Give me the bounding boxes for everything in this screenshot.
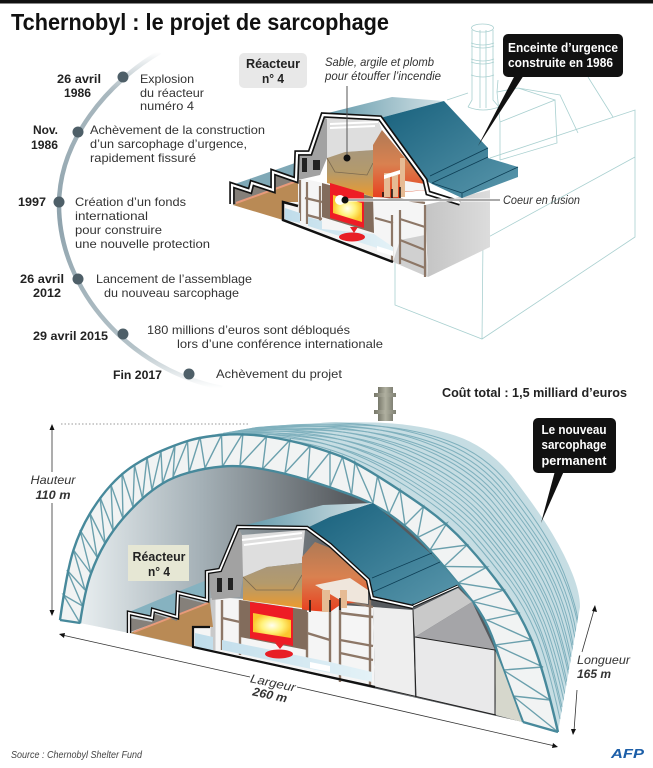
columns and floors (222, 600, 373, 686)
dimension: width: 260 m (250, 684, 289, 706)
reactor red shell (250, 602, 293, 646)
dimension: height: 110 m (36, 488, 71, 502)
callout: sand clay lead (324, 55, 441, 162)
front black outline (283, 202, 393, 262)
timeline descriptions (75, 72, 383, 381)
timeline dates: Fin 2017 (113, 368, 162, 382)
back wall (242, 530, 305, 577)
timeline descriptions: du nouveau sarcophage (104, 286, 239, 300)
sand (243, 563, 302, 608)
timeline descriptions: d’un sarcophage d’urgence, (90, 137, 247, 151)
timeline arc (59, 52, 222, 388)
back wall (327, 118, 382, 158)
timeline descriptions: Création d’un fonds (75, 195, 186, 209)
melting core (253, 613, 291, 638)
callout: sand clay lead: pour étouffer l’incendie (324, 69, 441, 83)
label: reactor no 4 in sarcophagus: n° 4 (148, 564, 171, 579)
source: Source : Chernobyl Shelter Fund (11, 750, 142, 761)
callout: melting core: Coeur en fusion (503, 193, 580, 207)
ground (130, 602, 213, 647)
dimension: length: 165 m (577, 667, 611, 681)
pool (285, 208, 393, 253)
timeline dots (54, 72, 194, 380)
label: reactor no 4: Réacteur (246, 56, 300, 71)
corium (265, 643, 293, 658)
dimension: height (30, 424, 250, 616)
dimension: length: Longueur (577, 653, 631, 667)
enclosure outline (232, 115, 460, 204)
truss members (60, 433, 558, 732)
timeline descriptions: lors d’une conférence internationale (177, 337, 383, 351)
title: Tchernobyl : le projet de sarcophage (11, 9, 389, 35)
melting core (333, 195, 362, 222)
ground (233, 180, 298, 220)
timeline descriptions: Achèvement de la construction (90, 123, 265, 137)
chimney (374, 387, 396, 421)
timeline dates: 2012 (33, 286, 61, 300)
timeline dates: 26 avril (20, 272, 64, 286)
label: reactor no 4 in sarcophagus (128, 545, 189, 581)
reactor block (240, 600, 307, 650)
blue roof (307, 503, 458, 607)
corium (339, 227, 365, 242)
dimension: height: Hauteur (30, 473, 77, 487)
timeline dates: 1997 (18, 195, 46, 209)
timeline descriptions: une nouvelle protection (75, 237, 210, 251)
pool (195, 633, 372, 682)
timeline dates: 26 avril (57, 72, 101, 86)
right chamber (373, 130, 427, 198)
stairs roof (129, 580, 207, 618)
timeline dates: 1986 (31, 138, 58, 152)
stairs back roof (232, 163, 298, 191)
reactor block (322, 183, 374, 233)
dimension: width: Largeur (249, 671, 298, 695)
back roof (320, 97, 444, 118)
dimension: width (59, 633, 558, 748)
outline (129, 527, 413, 633)
timeline descriptions: rapidement fissuré (90, 151, 196, 165)
truss outer and inner arcs (60, 434, 558, 732)
wireframe: original plant outline (395, 24, 635, 339)
back roof (238, 503, 373, 528)
truss band (60, 434, 558, 732)
label: reactor no 4: n° 4 (262, 71, 285, 86)
side blocks (413, 588, 472, 637)
eave (413, 586, 458, 606)
dome interior (80, 466, 523, 722)
reactor inside new sarcophagus (129, 503, 522, 722)
label: reactor no 4 (239, 53, 307, 88)
timeline dates: 29 avril 2015 (33, 329, 108, 343)
new sarcophagus dome (60, 422, 580, 732)
timeline descriptions: international (75, 209, 148, 223)
timeline descriptions: Explosion (140, 72, 194, 86)
timeline descriptions: 180 millions d’euros sont débloqués (147, 323, 350, 337)
timeline descriptions: numéro 4 (140, 99, 194, 113)
AFP logo: AFP (610, 746, 644, 761)
timeline descriptions: du réacteur (140, 86, 204, 100)
front black outline (193, 627, 375, 687)
concrete side (425, 190, 490, 277)
callout: emergency enclosure (478, 34, 623, 146)
timeline dates: Nov. (33, 123, 58, 137)
callout: new permanent sarcophagus (533, 418, 616, 523)
right chamber (302, 542, 368, 612)
label: reactor no 4 in sarcophagus: Réacteur (132, 549, 186, 564)
windows (302, 158, 320, 172)
timeline dates: 1986 (64, 86, 91, 100)
corrugation lines (206, 423, 578, 719)
total cost: Coût total : 1,5 milliard d’euros (442, 386, 627, 400)
blue roof (380, 101, 518, 198)
timeline descriptions: Achèvement du projet (216, 367, 343, 381)
callout: new permanent sarcophagus: sarcophage (542, 438, 607, 452)
dimension: length (571, 605, 631, 735)
reactor cutaway: emergency enclosure 1986 (232, 97, 518, 277)
lower interior (283, 178, 428, 277)
callout: new permanent sarcophagus: Le nouveau (542, 423, 606, 437)
timeline descriptions: Lancement de l’assemblage (96, 272, 252, 286)
callout: emergency enclosure: construite en 1986 (508, 56, 613, 70)
pillars (383, 158, 405, 198)
timeline descriptions: pour construire (75, 223, 162, 237)
reactor red shell (330, 183, 364, 228)
floors and columns (300, 180, 425, 277)
callout: sand clay lead: Sable, argile et plomb (325, 55, 434, 69)
callout: new permanent sarcophagus: permanent (542, 454, 607, 468)
upper grey wall (297, 115, 328, 180)
windows (217, 578, 233, 592)
lower interior (193, 597, 375, 687)
callout: emergency enclosure: Enceinte d’urgence (508, 41, 618, 55)
sand, clay and lead (327, 150, 373, 197)
upper grey wall (207, 527, 243, 600)
timeline dates (18, 72, 162, 382)
panel: timeline (18, 52, 383, 388)
corrugated back surface (200, 422, 580, 732)
top black bar (0, 0, 653, 4)
callout: melting core (335, 193, 580, 207)
